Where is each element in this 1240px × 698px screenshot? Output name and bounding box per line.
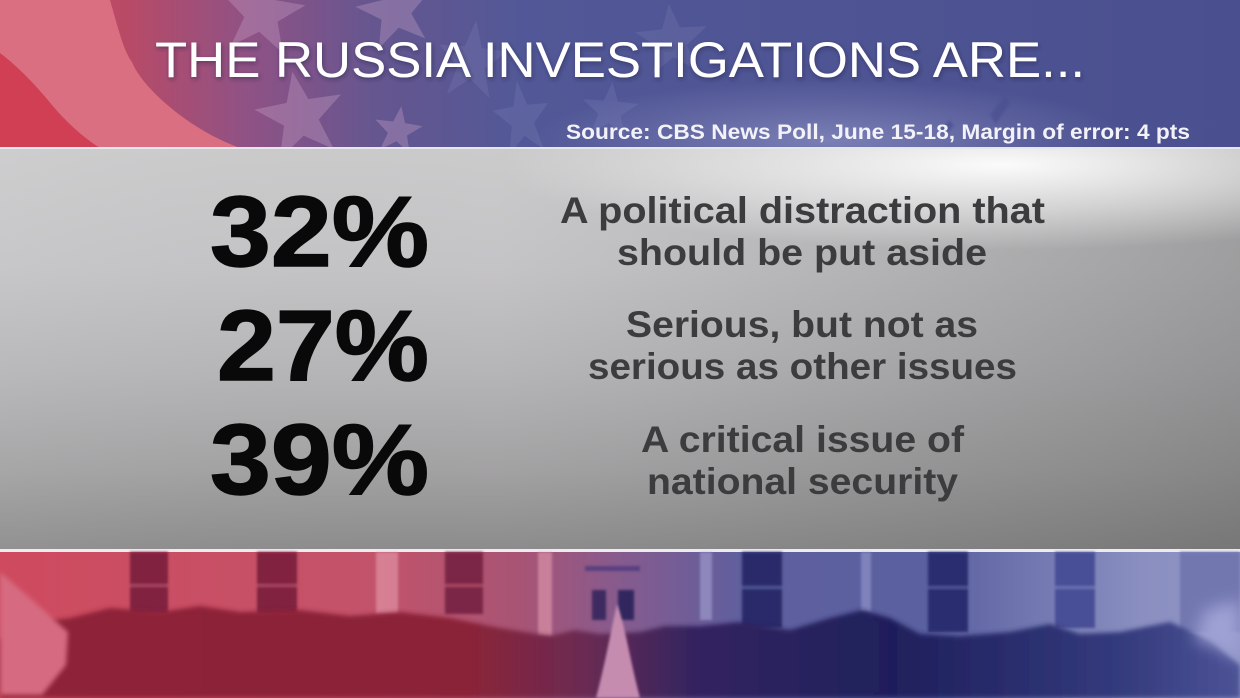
row 2: 27 percent xyxy=(217,290,1017,402)
source note: Source: CBS News Poll, June 15-18, Margin of error: 4 pts xyxy=(566,120,1190,144)
footer: White House photo band xyxy=(0,552,1240,698)
percentage 32: 32% xyxy=(210,176,429,288)
label: critical issue: national security xyxy=(647,461,958,502)
label: serious but not as serious xyxy=(588,304,1017,387)
tree at right xyxy=(1195,600,1240,660)
title: THE RUSSIA INVESTIGATIONS ARE... xyxy=(155,32,1085,88)
label: political distraction xyxy=(560,190,1045,273)
fountain xyxy=(596,604,640,698)
header banner: flag background xyxy=(0,0,1240,147)
flag stars xyxy=(228,0,426,147)
flag stripe: red corner xyxy=(0,53,100,148)
building columns xyxy=(376,552,871,636)
main grey panel xyxy=(0,147,1240,552)
north portico door xyxy=(585,566,640,620)
label: political distraction: should be put aside xyxy=(617,232,987,273)
label: serious but not as serious: serious as other issues xyxy=(588,346,1017,387)
label: critical issue: A critical issue of xyxy=(641,419,965,460)
row 3: 39 percent xyxy=(210,404,965,516)
hedge xyxy=(0,606,1240,698)
flag stripe: pink band xyxy=(0,0,240,148)
building windows xyxy=(130,552,1240,632)
label: political distraction: A political distraction that xyxy=(560,190,1045,231)
row 1: 32 percent xyxy=(210,176,1045,288)
label: serious but not as serious: Serious, but not as xyxy=(626,304,978,345)
tree at left xyxy=(0,572,68,695)
label: critical issue xyxy=(641,419,965,502)
percentage 27: 27% xyxy=(217,290,429,402)
percentage 39: 39% xyxy=(210,404,429,516)
